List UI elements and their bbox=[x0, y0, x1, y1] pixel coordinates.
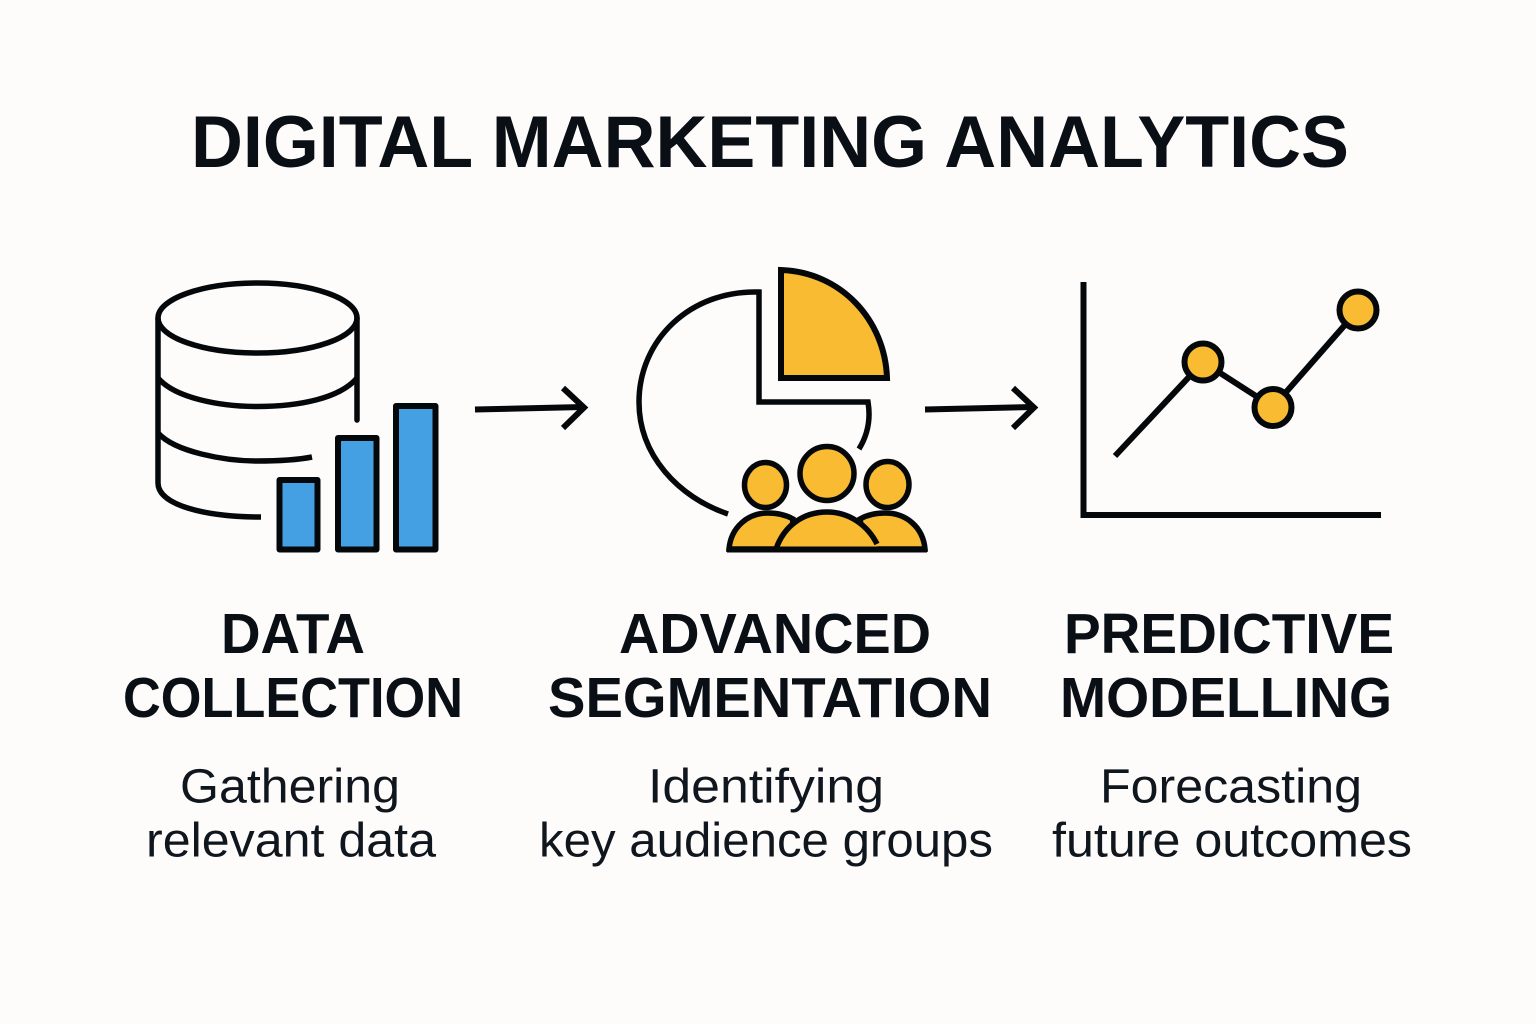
text: forecasting future outcomes bbox=[1052, 760, 1412, 868]
text: identifying key audience groups: Identifying bbox=[648, 760, 884, 814]
column: advanced segmentation bbox=[539, 602, 993, 868]
arrow: segmentation to modelling bbox=[925, 388, 1034, 428]
text: gathering relevant data: Gathering bbox=[180, 760, 400, 814]
heading: advanced segmentation bbox=[548, 602, 992, 730]
text: gathering relevant data bbox=[146, 760, 436, 868]
heading: predictive modelling: PREDICTIVE bbox=[1064, 602, 1394, 666]
title: DIGITAL MARKETING ANALYTICS bbox=[191, 102, 1349, 183]
heading: data collection bbox=[123, 602, 463, 730]
heading: data collection: COLLECTION bbox=[123, 666, 463, 730]
heading: predictive modelling bbox=[1060, 602, 1394, 730]
arrow: collection to segmentation bbox=[475, 388, 584, 428]
heading: advanced segmentation: SEGMENTATION bbox=[548, 666, 992, 730]
heading: data collection: DATA bbox=[221, 602, 365, 666]
text: identifying key audience groups bbox=[539, 760, 993, 868]
icon: line chart bbox=[1084, 282, 1381, 515]
icon: database with bar chart bbox=[158, 283, 436, 550]
icon: audience group bbox=[727, 446, 927, 550]
heading: predictive modelling: MODELLING bbox=[1060, 666, 1392, 730]
text: identifying key audience groups: key audience groups bbox=[539, 814, 993, 868]
column: data collection bbox=[123, 602, 463, 868]
icon: pie chart with audience group bbox=[639, 270, 927, 550]
text: forecasting future outcomes: Forecasting bbox=[1100, 760, 1362, 814]
text: forecasting future outcomes: future outcomes bbox=[1052, 814, 1412, 868]
heading: advanced segmentation: ADVANCED bbox=[619, 602, 931, 666]
text: gathering relevant data: relevant data bbox=[146, 814, 436, 868]
column: predictive modelling bbox=[1052, 602, 1412, 868]
